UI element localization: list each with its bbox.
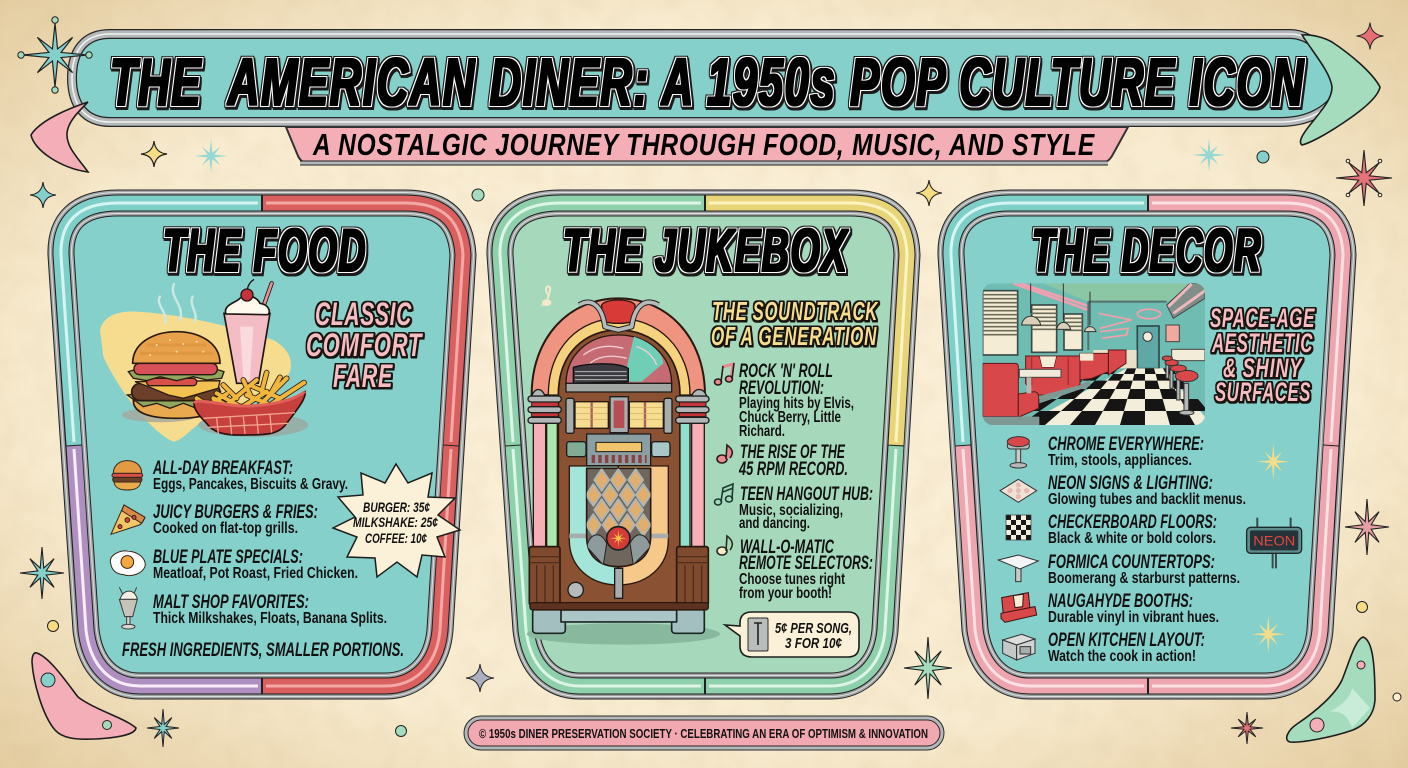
- jukebox list text: 45 RPM RECORD.: [738, 458, 848, 480]
- panel: the jukebox: [500, 203, 907, 686]
- heading: the decor: THE DECOR: [1032, 217, 1262, 284]
- icon: yellow sparkles: [1251, 444, 1289, 653]
- tagline: classic comfort fare: CLASSIC: [315, 296, 412, 332]
- decor list text: Watch the cook in action!: [1048, 648, 1196, 665]
- tagline: space-age aesthetic: SURFACES: [1215, 377, 1311, 407]
- callout: price per song: [725, 612, 859, 657]
- jukebox list text: and dancing.: [739, 515, 810, 532]
- illustration: burger, milkshake and fries: [100, 279, 308, 442]
- subtitle ribbon: [286, 127, 1128, 164]
- neon tube frame: jukebox: [500, 203, 907, 686]
- food list text: Eggs, Pancakes, Biscuits & Gravy.: [153, 476, 348, 493]
- tagline: space-age aesthetic: SPACE-AGE: [1210, 303, 1315, 333]
- jukebox list text: Music, socializing,: [739, 502, 843, 519]
- jukebox list text: Playing hits by Elvis,: [739, 395, 854, 412]
- jukebox list text: ROCK 'N' ROLL: [739, 360, 833, 382]
- callout: price starburst: BURGER: 35¢: [363, 499, 430, 515]
- food list text: BLUE PLATE SPECIALS:: [153, 546, 303, 568]
- jukebox list text: Richard.: [739, 423, 785, 440]
- food list text: [122, 457, 404, 661]
- decor list text: CHROME EVERYWHERE:: [1048, 433, 1204, 455]
- icon: booth: [1001, 593, 1037, 622]
- illustration: jukebox: [527, 286, 720, 645]
- panel: the food: [61, 203, 463, 686]
- jukebox list text: Choose tunes right: [739, 571, 845, 588]
- decor list text: Boomerang & starburst patterns.: [1048, 570, 1240, 587]
- decor list text: Durable vinyl in vibrant hues.: [1048, 609, 1219, 626]
- food list text: JUICY BURGERS & FRIES:: [153, 501, 318, 523]
- callout: price per song: 5¢ PER SONG,: [775, 620, 852, 637]
- icon: kitchen range: [1003, 634, 1035, 660]
- neon tube frame: decor: [951, 203, 1343, 686]
- food list text: Thick Milkshakes, Floats, Banana Splits.: [153, 610, 387, 627]
- icon: checkerboard: [1006, 515, 1031, 540]
- heading: the food: THE FOOD: [163, 217, 367, 284]
- decor list text: FORMICA COUNTERTOPS:: [1048, 551, 1215, 573]
- icon: chrome stool: [1007, 437, 1029, 468]
- jukebox list text: Chuck Berry, Little: [739, 409, 841, 426]
- decor list text: NAUGAHYDE BOOTHS:: [1048, 590, 1193, 612]
- icon: fried egg: [110, 551, 145, 576]
- icon: neon sign: [1247, 518, 1302, 568]
- subtitle text: A NOSTALGIC JOURNEY THROUGH FOOD, MUSIC, AND STYLE: [312, 127, 1095, 162]
- jukebox list text: WALL-O-MATIC: [740, 536, 835, 558]
- callout: price starburst: COFFEE: 10¢: [365, 530, 427, 546]
- food list icons: [110, 461, 145, 629]
- title banner: [72, 34, 1343, 122]
- icon: burger: [112, 461, 143, 490]
- food list text: MALT SHOP FAVORITES:: [153, 591, 309, 613]
- decor list text: Glowing tubes and backlit menus.: [1048, 491, 1246, 508]
- callout: price per song: 3 FOR 10¢: [785, 635, 843, 652]
- jukebox list text: THE RISE OF THE: [740, 441, 846, 463]
- decor list icons: [998, 437, 1302, 660]
- callout: price starburst: [333, 464, 460, 577]
- jukebox list text: [738, 360, 873, 602]
- tagline: classic comfort fare: FARE: [333, 358, 393, 394]
- icon: malt glass: [119, 587, 137, 629]
- decor list text: Black & white or bold colors.: [1048, 530, 1216, 547]
- tagline: the soundtrack of a generation: THE SOUNDTRACK: [712, 296, 879, 326]
- jukebox list text: from your booth!: [739, 585, 832, 602]
- jukebox list text: REMOTE SELECTORS:: [739, 552, 873, 574]
- neon tube frame: food: [61, 203, 463, 686]
- music note icons: [714, 363, 734, 555]
- food list text: Meatloaf, Pot Roast, Fried Chicken.: [153, 565, 358, 582]
- decor list text: [1048, 433, 1246, 665]
- callout: price starburst: MILKSHAKE: 25¢: [353, 514, 438, 530]
- tagline: space-age aesthetic: & SHINY: [1223, 353, 1303, 383]
- footer text: © 1950s DINER PRESERVATION SOCIETY · CELEBRATING AN ERA OF OPTIMISM & INNOVATION: [479, 726, 928, 741]
- tagline: classic comfort fare: [306, 296, 423, 394]
- icon: pizza slice: [111, 505, 145, 534]
- footer plaque: [466, 718, 942, 748]
- food list text: Cooked on flat-top grills.: [153, 520, 298, 537]
- tagline: the soundtrack of a generation: OF A GENERATION: [711, 321, 877, 351]
- tagline: space-age aesthetic: [1210, 303, 1315, 407]
- illustration: diner interior: [983, 283, 1208, 425]
- panel: the decor: [951, 203, 1343, 686]
- icon: neon tile: [1000, 479, 1037, 502]
- heading: the jukebox: THE JUKEBOX: [563, 217, 849, 284]
- jukebox list text: REVOLUTION:: [739, 377, 824, 399]
- decor list text: CHECKERBOARD FLOORS:: [1048, 511, 1217, 533]
- decor list text: Trim, stools, appliances.: [1048, 452, 1192, 469]
- decor list text: OPEN KITCHEN LAYOUT:: [1048, 629, 1205, 651]
- icon: formica table: [998, 555, 1038, 582]
- tagline: space-age aesthetic: AESTHETIC: [1211, 328, 1313, 358]
- food list text: ALL-DAY BREAKFAST:: [152, 457, 293, 479]
- food list text: FRESH INGREDIENTS, SMALLER PORTIONS.: [122, 639, 404, 661]
- decor list text: NEON SIGNS & LIGHTING:: [1048, 472, 1213, 494]
- jukebox list text: TEEN HANGOUT HUB:: [740, 483, 873, 505]
- tagline: classic comfort fare: COMFORT: [306, 327, 423, 363]
- icon: neon sign: NEON: [1253, 533, 1295, 549]
- tagline: the soundtrack of a generation: [711, 296, 879, 351]
